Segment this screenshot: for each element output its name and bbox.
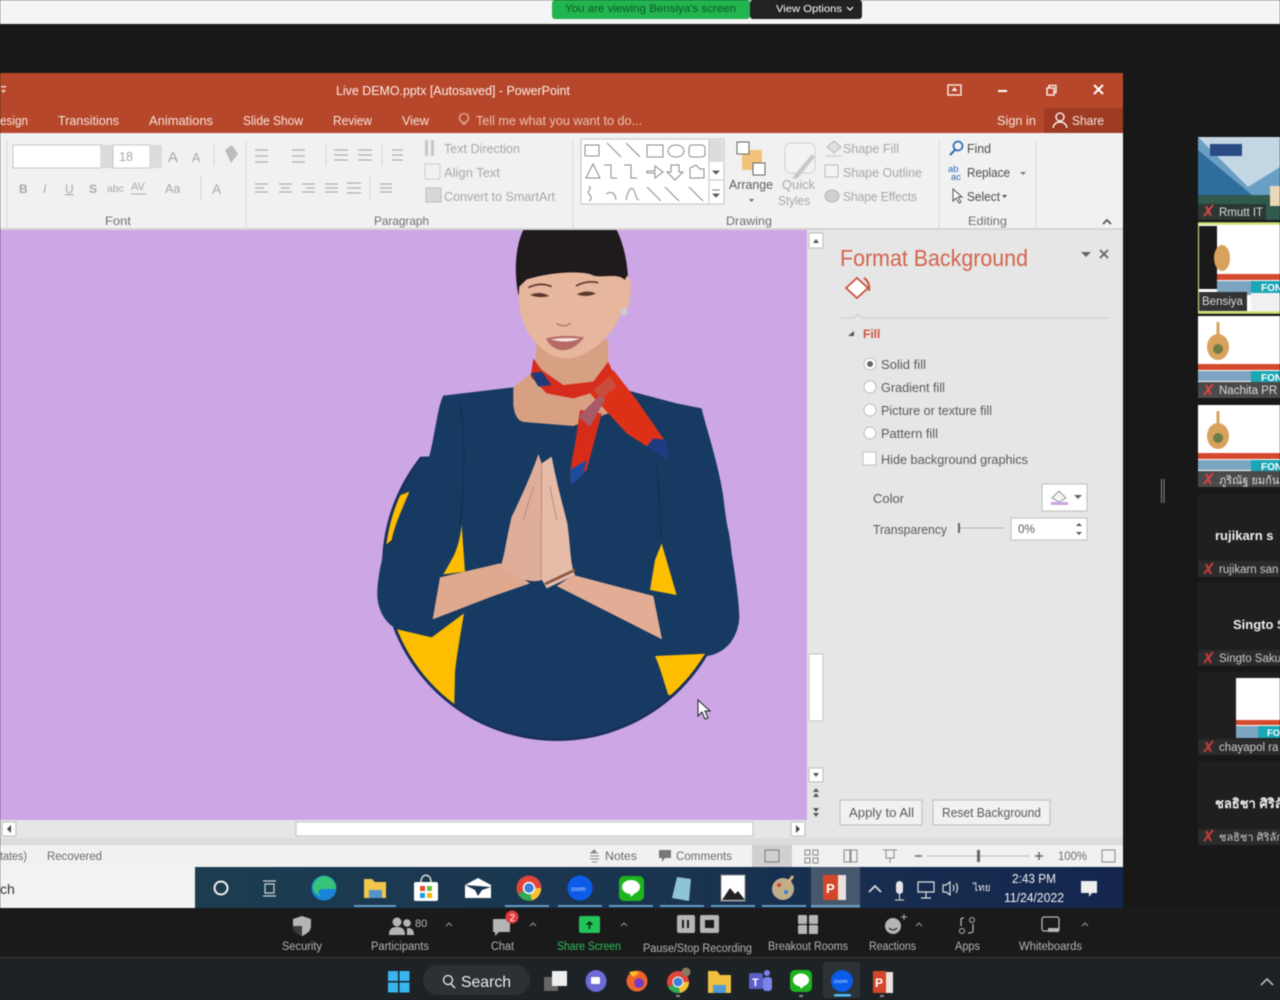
ribbon: font group: A (192, 151, 201, 165)
powerpoint title bar (0, 73, 1123, 133)
ribbon: font group: A (212, 181, 222, 197)
whiteboards (1019, 917, 1088, 953)
apps (955, 918, 980, 953)
reactions (869, 914, 922, 953)
ribbon: shapes gallery (581, 139, 724, 204)
ribbon: drawing group: Arrange (729, 178, 773, 192)
participant: rujikarn: rujikarn san (1219, 564, 1278, 576)
embedded windows taskbar: ch (0, 881, 15, 897)
format background pane: Picture or texture fill (881, 404, 992, 418)
icon: zoom (568, 876, 592, 900)
powerpoint status bar: Recovered (47, 851, 102, 863)
icon: notebook (672, 877, 691, 901)
ribbon tabs: Review (333, 114, 373, 128)
ribbon: paragraph group: Paragraph (374, 214, 429, 228)
system tray: ไทย (972, 882, 990, 894)
ribbon tabs: Animations (149, 114, 213, 128)
pause and stop recording (643, 915, 752, 955)
format background pane: Fill (863, 327, 880, 341)
format background pane: Transparency (873, 523, 948, 537)
pause and stop recording: Pause/Stop Recording (643, 943, 752, 955)
ribbon tabs: Tell me what you want to do... (476, 114, 642, 128)
ribbon: drawing group: Drawing (726, 214, 772, 228)
system tray (869, 872, 1097, 905)
system tray: 11/24/2022 (1004, 891, 1064, 905)
ribbon panel (0, 133, 1123, 230)
ribbon tabs (0, 113, 1104, 128)
powerpoint status bar (0, 838, 1123, 867)
powerpoint status bar: Comments (676, 851, 732, 863)
ribbon tabs: Sign in (997, 114, 1036, 128)
overflow chevron (1261, 979, 1273, 985)
icon: photos (721, 875, 745, 901)
photo: woman in navy dress with wai gesture in a circle (377, 230, 739, 741)
icon: task view (263, 881, 276, 896)
format background pane: Solid fill (881, 358, 926, 372)
participant: rujikarn: rujikarn s (1215, 528, 1274, 543)
icon: firefox (626, 970, 648, 992)
ribbon: drawing group: Shape Fill (843, 142, 899, 156)
icon: folder (708, 971, 731, 993)
participants: Participants (371, 941, 429, 953)
participant: chayapol: chayapol ra (1219, 742, 1279, 754)
icon: teams: T (752, 977, 759, 989)
format background pane: Gradient fill (881, 381, 945, 395)
ribbon: font group: Font (105, 214, 132, 228)
icon: powerpoint (823, 875, 846, 900)
icon: powerpoint (873, 971, 893, 993)
icon: store (414, 875, 438, 901)
participant: Thai name 1 (1198, 405, 1280, 487)
ribbon: font group: B (19, 182, 28, 196)
hair (516, 230, 628, 295)
ribbon: editing group: Select (967, 190, 1000, 204)
security (282, 916, 322, 953)
zoom top banner: You are viewing Bensiya's screen (565, 3, 736, 15)
participant: chayapol (1198, 672, 1280, 755)
ribbon: font group: AV (131, 181, 146, 193)
participant: Thai name 1: ภูริณัฐ ยมก้น (1219, 475, 1280, 487)
participant: Rmutt IT: Rmutt IT (1219, 207, 1263, 219)
ribbon: font group: I (43, 182, 47, 196)
zoom top banner: View Options (776, 3, 842, 15)
ribbon: paragraph group: Text Direction (444, 142, 520, 156)
icon: cortana (214, 882, 228, 894)
vertical scrollbar (807, 230, 825, 820)
ribbon: editing group: Replace (967, 166, 1010, 180)
search pill: Search (461, 974, 511, 991)
horizontal scrollbar (0, 820, 825, 845)
icon: line (790, 970, 812, 992)
zoom top banner (0, 0, 1280, 24)
icon: chrome (516, 876, 542, 901)
ribbon tabs: esign (0, 114, 28, 128)
ribbon: font group: A (168, 149, 178, 166)
icon: windows logo (388, 971, 410, 992)
praying hands (433, 454, 662, 639)
participant: Singto (1198, 618, 1280, 666)
chat: Chat (491, 941, 515, 953)
ribbon: paragraph group (255, 140, 556, 228)
ribbon: editing group: Editing (968, 214, 1007, 228)
icon: line (619, 876, 644, 901)
local windows 11 taskbar (0, 958, 1280, 1000)
format background pane: Pattern fill (881, 427, 938, 441)
participant: Nachita PR: Nachita PR (1219, 385, 1277, 397)
breakout rooms: Breakout Rooms (768, 941, 848, 953)
participant: chayapol: FO (1267, 728, 1280, 739)
icon: task view (544, 971, 567, 991)
format background pane: Reset Background (942, 806, 1041, 820)
powerpoint status bar: Notes (605, 851, 637, 863)
ribbon: font group: Aa (165, 182, 180, 196)
powerpoint title bar: Live DEMO.pptx [Autosaved] - PowerPoint (336, 84, 571, 98)
ribbon: editing group: Find (967, 142, 991, 156)
participant: Rmutt IT (1198, 137, 1280, 220)
embedded windows taskbar (0, 867, 1123, 908)
share screen: Share Screen (557, 941, 621, 953)
ribbon: drawing group: Quick (782, 178, 816, 192)
icon: edge (312, 876, 336, 900)
participants: 80 (415, 918, 427, 930)
icon: powerpoint: P (826, 881, 835, 896)
mouse cursor (698, 700, 710, 719)
scarf (531, 358, 668, 485)
dress silhouette (377, 387, 739, 738)
participant: Bensiya (active speaker) (1198, 224, 1280, 312)
ribbon: font group: abc (107, 183, 124, 195)
ribbon: font group: S (89, 182, 97, 196)
face (519, 272, 631, 358)
ribbon tabs: Share (1072, 114, 1104, 128)
dress seams (460, 403, 662, 543)
ribbon tabs: Slide Show (243, 114, 304, 128)
earring (620, 308, 628, 316)
icon: file explorer (364, 879, 386, 898)
format background pane: Format Background (840, 245, 1028, 271)
participant: Nachita PR (1198, 316, 1280, 398)
neck (513, 340, 608, 426)
taskbar running dots (676, 995, 884, 997)
participant strip (1198, 137, 1280, 845)
ribbon: font group: U (65, 182, 74, 196)
ribbon: paragraph group: Convert to SmartArt (444, 190, 556, 204)
eyebrows, eyes and mouth (528, 282, 598, 350)
ribbon: editing group: ab (948, 164, 959, 175)
ribbon: editing group (948, 142, 1111, 228)
ribbon tabs: View (402, 114, 430, 128)
ribbon: drawing group: Shape Outline (843, 166, 922, 180)
format background pane: Apply to All (849, 806, 914, 820)
participant: Bensiya (active speaker): Bensiya (1202, 296, 1244, 308)
participant: Singto: Singto Saku (1219, 653, 1280, 665)
icon: chrome (667, 968, 690, 993)
powerpoint status bar: tates) (0, 851, 27, 863)
format background pane (825, 230, 1123, 845)
ribbon: drawing group (726, 141, 922, 228)
chat: 2 (510, 913, 516, 924)
format background pane: Hide background graphics (881, 453, 1028, 467)
icon: zoom: zoom (834, 979, 848, 985)
icon: powerpoint: P (875, 976, 883, 990)
icon: meet (586, 970, 606, 992)
ribbon: font group (13, 144, 238, 228)
icon: zoom: zoom (571, 887, 586, 893)
security: Security (282, 941, 322, 953)
powerpoint status bar: 100% (1058, 851, 1087, 863)
icon: paint palette (772, 876, 794, 900)
yellow background showing behind the arms (380, 492, 713, 707)
system tray: 2:43 PM (1012, 872, 1056, 886)
participant: Thai name 2 (1198, 796, 1280, 845)
chat (491, 910, 536, 953)
whiteboards: Whiteboards (1019, 941, 1082, 953)
icon: teams (749, 970, 772, 991)
ribbon tabs: Transitions (58, 114, 119, 128)
participant: rujikarn (1198, 530, 1280, 577)
participants (371, 918, 452, 953)
format background pane: 0% (1018, 524, 1035, 536)
ribbon: font group: 18 (119, 150, 133, 164)
ribbon: drawing group: Shape Effects (843, 190, 917, 204)
breakout rooms (768, 915, 848, 953)
ribbon: drawing group: Styles (778, 194, 810, 208)
ribbon: paragraph group: Align Text (444, 166, 501, 180)
zoom meeting toolbar (0, 908, 1280, 958)
slide canvas (0, 230, 807, 820)
search pill (423, 965, 530, 995)
apps: Apps (955, 941, 980, 953)
share screen (557, 916, 627, 953)
zoom panel handle (1162, 479, 1164, 503)
ribbon: editing group: ac (951, 172, 961, 183)
format background pane: Color (873, 492, 904, 506)
icon: mail (465, 878, 491, 898)
reactions: Reactions (869, 941, 916, 953)
icon: zoom (831, 970, 853, 996)
